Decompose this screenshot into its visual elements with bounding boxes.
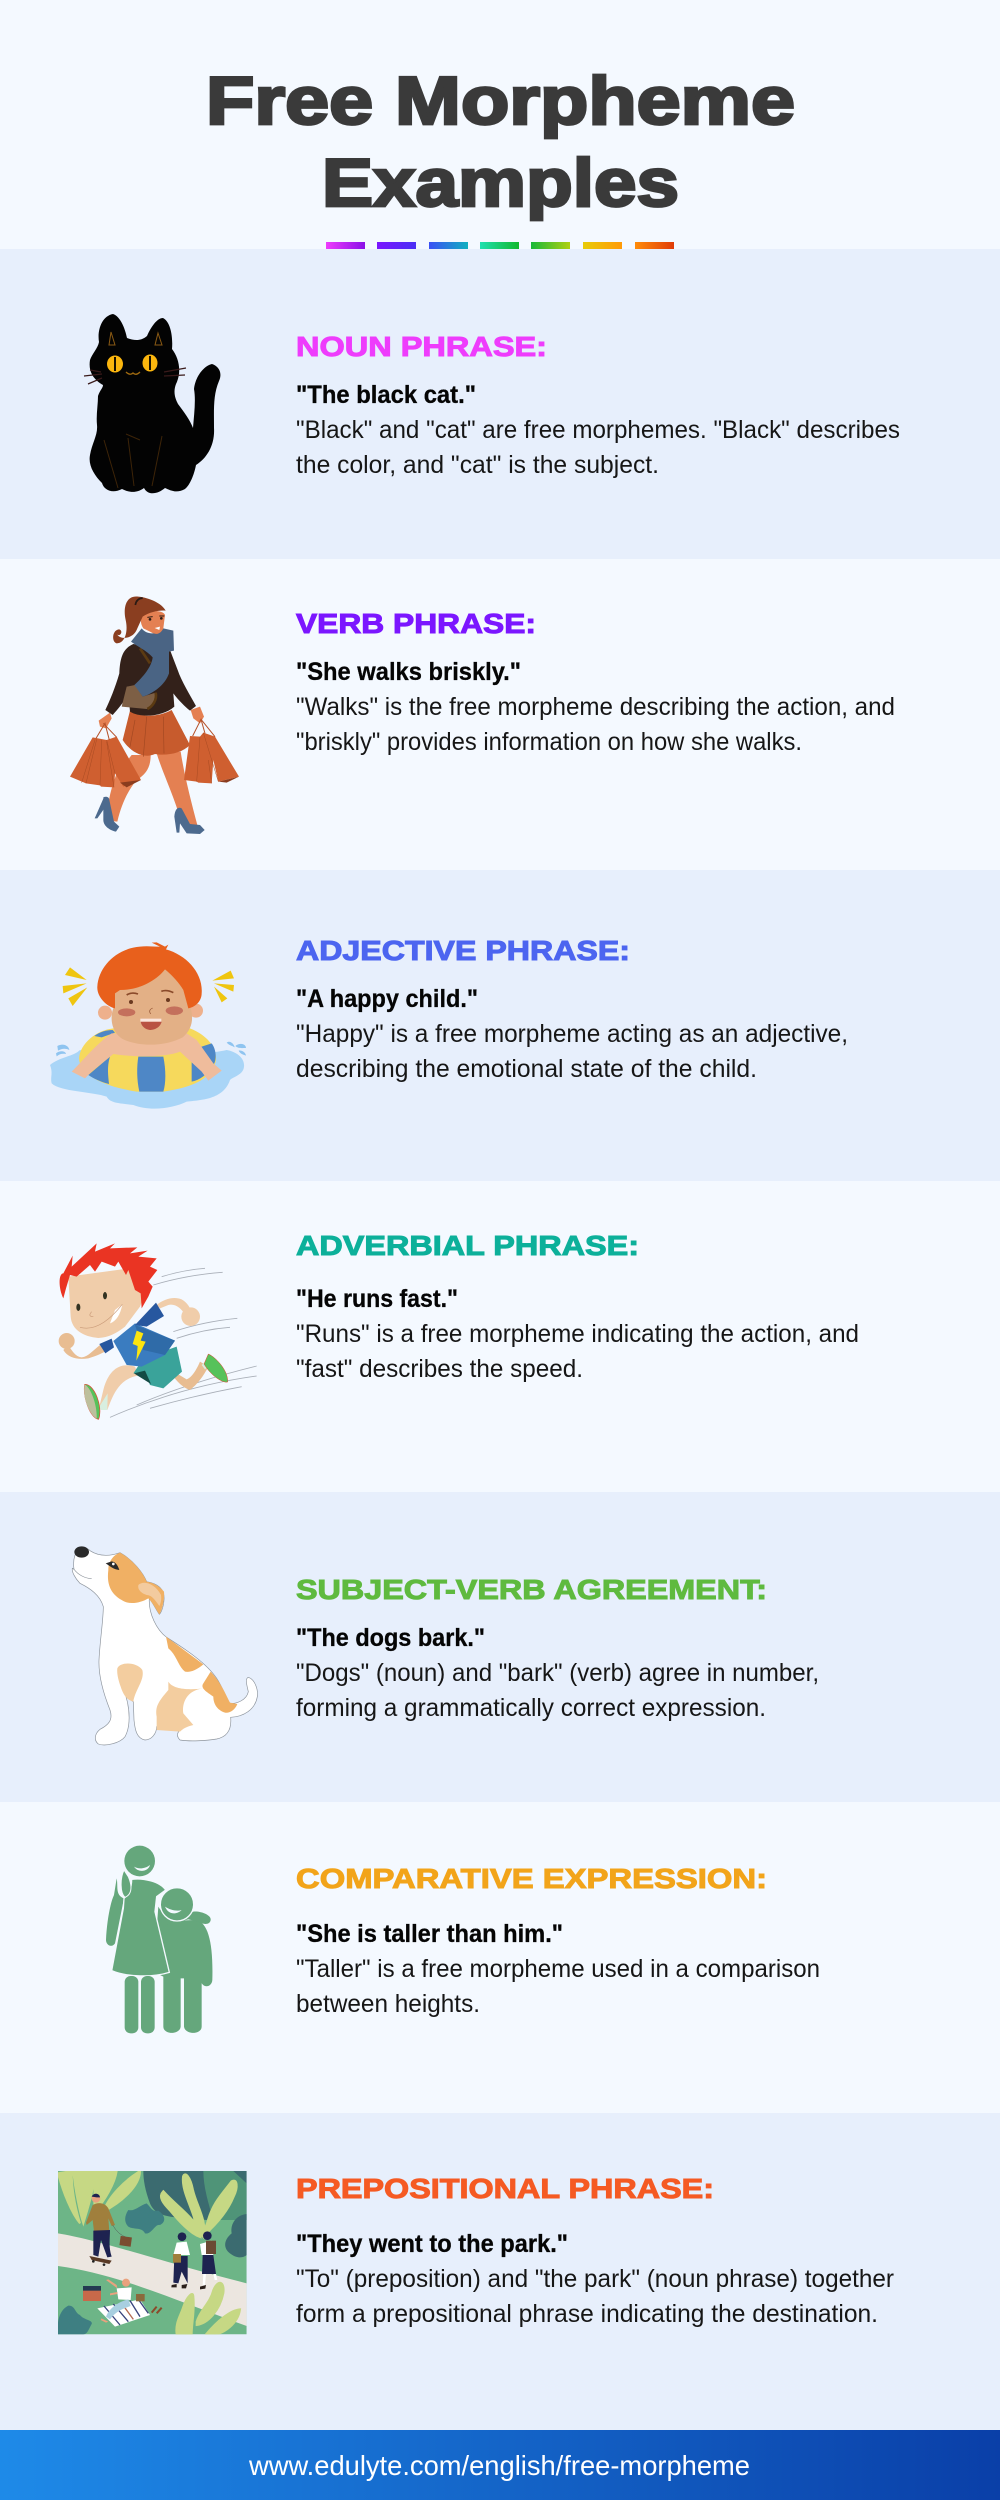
icon: black cat bbox=[84, 314, 220, 493]
explanation: between heights. bbox=[296, 1990, 480, 2018]
explanation bbox=[296, 1020, 848, 1083]
icon: woman with shopping bags bbox=[70, 597, 239, 834]
explanation bbox=[296, 416, 900, 479]
example: "She is taller than him." bbox=[296, 1920, 563, 1948]
panel: verb phrase bbox=[0, 559, 1000, 870]
example: "The black cat." bbox=[296, 381, 476, 409]
example: "She walks briskly." bbox=[296, 658, 521, 686]
explanation: "Dogs" (noun) and "bark" (verb) agree in number, bbox=[296, 1659, 819, 1687]
explanation bbox=[296, 2265, 894, 2328]
panel: adjective phrase bbox=[0, 870, 1000, 1181]
example: "He runs fast." bbox=[296, 1285, 458, 1313]
heading: NOUN PHRASE: bbox=[296, 331, 547, 362]
explanation bbox=[296, 1955, 820, 2018]
icon: tall woman and short boy bbox=[106, 1846, 212, 2033]
explanation: the color, and "cat" is the subject. bbox=[296, 451, 659, 479]
explanation: "Happy" is a free morpheme acting as an adjective, bbox=[296, 1020, 848, 1048]
heading: PREPOSITIONAL PHRASE: bbox=[296, 2173, 714, 2204]
icon: barking dog bbox=[72, 1546, 258, 1745]
icon: happy child in swim ring bbox=[50, 942, 246, 1109]
explanation bbox=[296, 693, 895, 756]
heading: ADJECTIVE PHRASE: bbox=[296, 935, 630, 966]
explanation: "Runs" is a free morpheme indicating the action, and bbox=[296, 1320, 859, 1348]
heading: ADVERBIAL PHRASE: bbox=[296, 1230, 639, 1261]
footer url: www.edulyte.com/english/free-morpheme bbox=[248, 2450, 750, 2481]
panel: subject-verb agreement bbox=[0, 1492, 1000, 1802]
heading: COMPARATIVE EXPRESSION: bbox=[296, 1863, 767, 1894]
header panel bbox=[0, 0, 1000, 249]
example: "A happy child." bbox=[296, 985, 478, 1013]
icon: park scene bbox=[58, 2171, 247, 2334]
explanation: "To" (preposition) and "the park" (noun phrase) together bbox=[296, 2265, 894, 2293]
title bbox=[206, 63, 795, 221]
explanation bbox=[296, 1320, 859, 1383]
example: "The dogs bark." bbox=[296, 1624, 485, 1652]
explanation: describing the emotional state of the child. bbox=[296, 1055, 757, 1083]
heading: SUBJECT-VERB AGREEMENT: bbox=[296, 1574, 767, 1605]
explanation: "fast" describes the speed. bbox=[296, 1355, 583, 1383]
explanation: "Taller" is a free morpheme used in a comparison bbox=[296, 1955, 820, 1983]
explanation: "Black" and "cat" are free morphemes. "Black" describes bbox=[296, 416, 900, 444]
explanation: "Walks" is the free morpheme describing the action, and bbox=[296, 693, 895, 721]
explanation bbox=[296, 1659, 819, 1722]
explanation: "briskly" provides information on how she walks. bbox=[296, 728, 802, 756]
example: "They went to the park." bbox=[296, 2230, 568, 2258]
explanation: form a prepositional phrase indicating the destination. bbox=[296, 2300, 878, 2328]
panel: adverbial phrase bbox=[0, 1181, 1000, 1492]
title: Free Morpheme bbox=[206, 63, 795, 139]
footer bbox=[0, 2430, 1000, 2500]
title: Examples bbox=[322, 145, 679, 221]
heading: VERB PHRASE: bbox=[296, 608, 536, 639]
panel: prepositional phrase bbox=[0, 2113, 1000, 2430]
panel: noun phrase bbox=[0, 249, 1000, 559]
colour swatches bbox=[326, 242, 674, 249]
explanation: forming a grammatically correct expression. bbox=[296, 1694, 766, 1722]
panel: comparative expression bbox=[0, 1802, 1000, 2113]
icon: running boy bbox=[59, 1243, 257, 1419]
